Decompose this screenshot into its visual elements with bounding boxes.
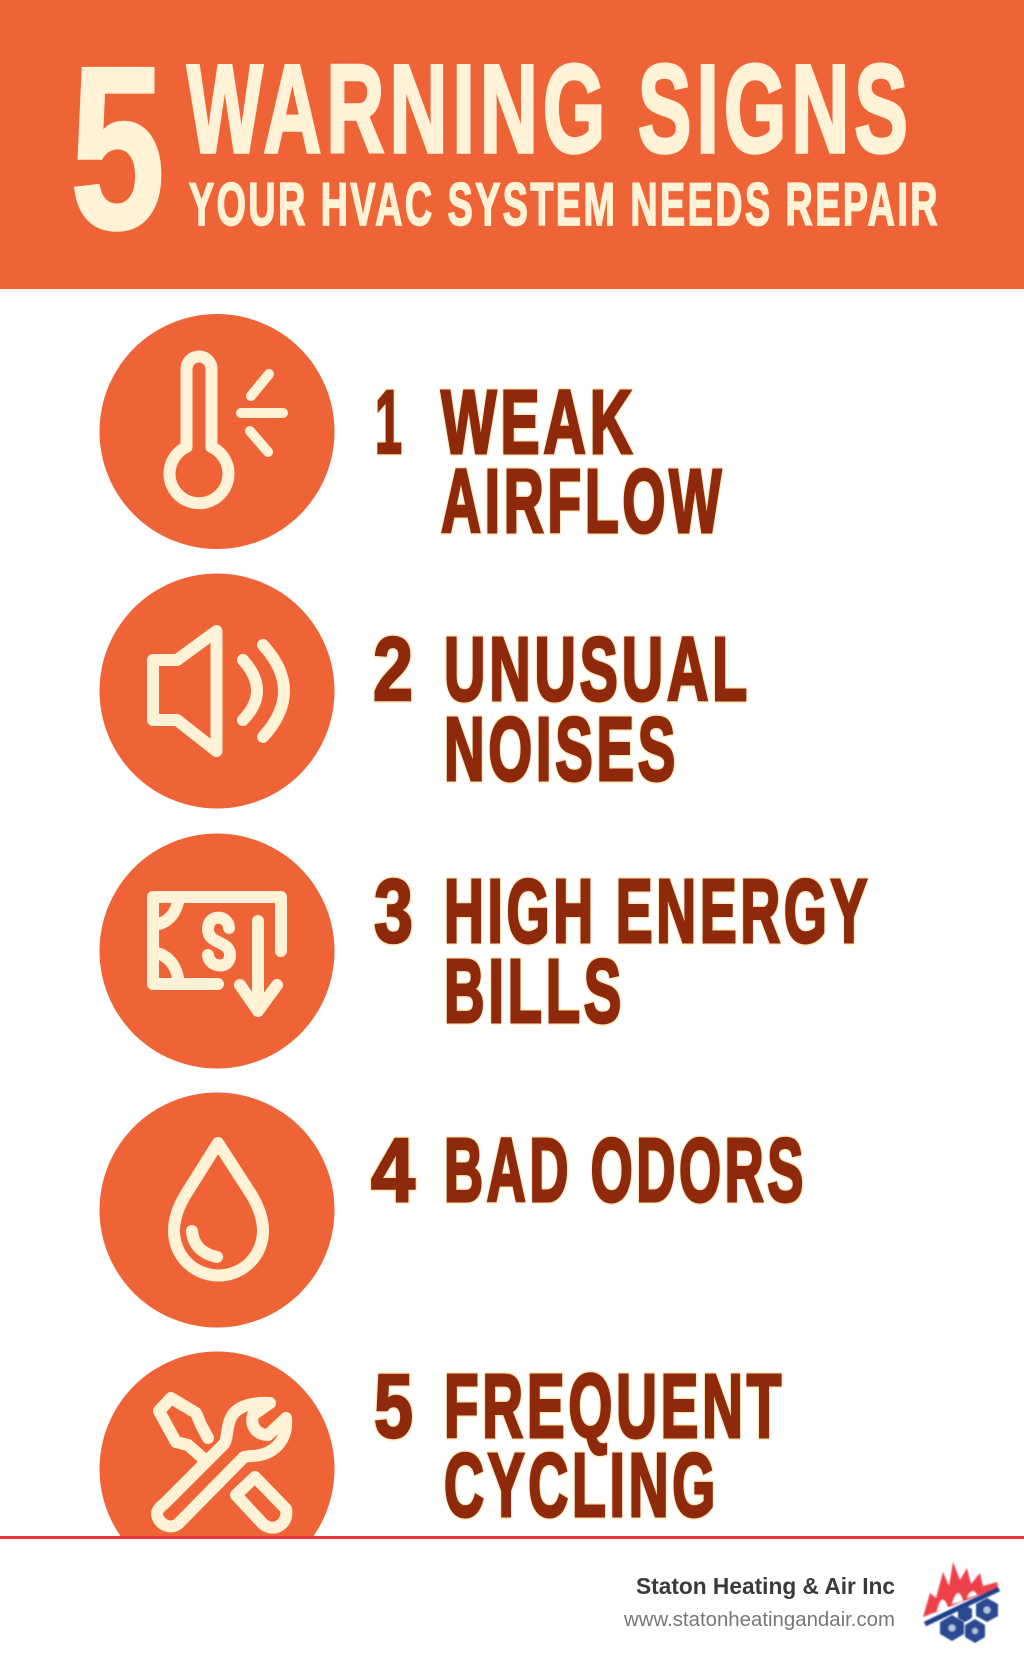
label: weak airflow: WEAK xyxy=(441,373,636,473)
icon: water drop xyxy=(100,1092,334,1328)
label: frequent cycling: CYCLING xyxy=(444,1436,719,1536)
number 3: 3 xyxy=(374,862,413,962)
label: weak airflow: AIRFLOW xyxy=(441,452,725,552)
item 1: weak airflow xyxy=(100,314,725,552)
number 1: 1 xyxy=(375,373,402,473)
big numeral 5: 5 xyxy=(70,19,165,278)
label: unusual noises: UNUSUAL xyxy=(444,620,751,720)
label: unusual noises: UNUSUAL xyxy=(444,620,751,720)
icon: wrench and screwdriver xyxy=(100,1352,334,1536)
item 3: high energy bills xyxy=(100,834,871,1068)
label: frequent cycling: CYCLING xyxy=(444,1436,719,1536)
label: frequent cycling: FREQUENT xyxy=(444,1357,785,1457)
label: high energy bills: BILLS xyxy=(444,942,625,1042)
label: weak airflow: WEAK xyxy=(441,373,636,473)
footer xyxy=(0,1536,1024,1643)
label: unusual noises: NOISES xyxy=(444,700,679,800)
number 2: 2 xyxy=(373,620,413,720)
item 2: unusual noises xyxy=(100,574,751,808)
number 2: 2 xyxy=(373,620,413,720)
company name: Staton Heating & Air Inc xyxy=(636,1573,895,1599)
icon: bill with down arrow xyxy=(100,834,334,1068)
website: www.statonheatingandair.com xyxy=(623,1608,895,1631)
icon: speaker xyxy=(100,574,334,808)
number 5: 5 xyxy=(374,1357,413,1457)
item 5: frequent cycling xyxy=(100,1352,783,1536)
label: bad odors xyxy=(444,1121,807,1221)
number 3: 3 xyxy=(374,862,413,962)
number 4: 4 xyxy=(371,1121,415,1221)
label: unusual noises: NOISES xyxy=(444,700,679,800)
header banner xyxy=(0,0,1024,289)
label: weak airflow: AIRFLOW xyxy=(441,452,725,552)
label: high energy bills xyxy=(444,862,871,1042)
number 4: 4 xyxy=(371,1121,415,1221)
label: weak airflow xyxy=(441,373,725,552)
icon: thermometer xyxy=(100,314,334,549)
label: frequent cycling: FREQUENT xyxy=(444,1357,785,1457)
label: frequent cycling xyxy=(444,1357,785,1536)
item 4: bad odors xyxy=(100,1092,807,1328)
label: unusual noises xyxy=(444,620,751,800)
number 5: 5 xyxy=(374,1357,413,1457)
number 1: 1 xyxy=(375,373,402,473)
number 1 xyxy=(375,373,402,473)
label: high energy bills: BILLS xyxy=(444,942,625,1042)
logo: flame and snowflake xyxy=(923,1562,999,1643)
